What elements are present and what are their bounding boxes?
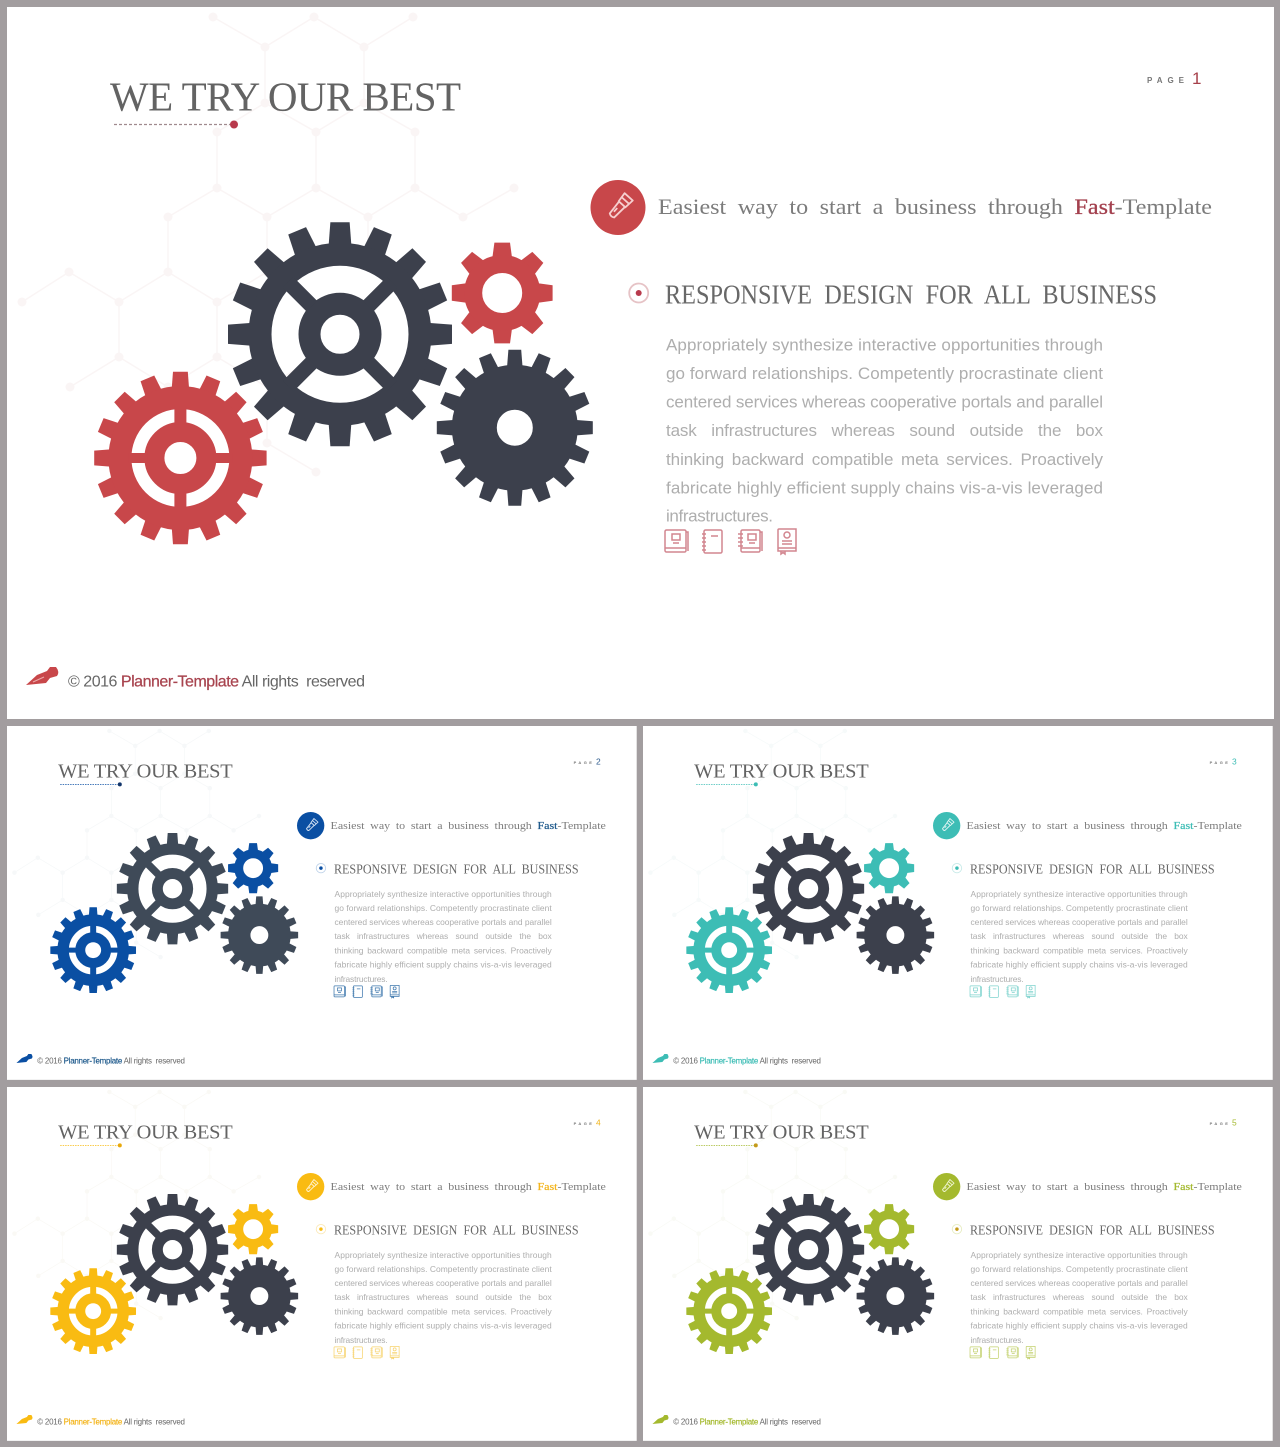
honeycomb background pattern [12,729,261,959]
title underline with dot [60,782,122,786]
section heading: RESPONSIVE DESIGN FOR ALL BUSINESS [334,1222,579,1237]
body paragraph: fabricate highly efficient supply chains vis-a-vis leveraged [971,960,1188,970]
footer copyright: © 2016 Planner-Template All rights reserved [673,1418,821,1427]
gear: large dark [706,1147,911,1353]
page number [1210,756,1237,766]
body paragraph: infrastructures. [335,974,388,984]
body paragraph: go forward relationships. Competently procrastinate client [971,1264,1188,1274]
title underline with dot [114,120,238,128]
body paragraph: centered services whereas cooperative portals and parallel [666,393,1103,412]
gear: solid dark [371,284,659,572]
gear: target accent [14,1232,172,1390]
tagline: Easiest way to start a business through Fast-Template [967,1181,1242,1193]
page number: PAGE [574,1121,592,1126]
page number [1147,69,1201,88]
page number [574,1117,601,1127]
section heading: RESPONSIVE DESIGN FOR ALL BUSINESS [665,280,1157,310]
gear: large dark [70,786,275,992]
bullet marker [629,284,648,302]
title: WE TRY OUR BEST [694,760,869,782]
page number: PAGE [1210,1121,1228,1126]
icon: pen nib logo [26,667,58,685]
slide 5: green [643,1087,1273,1441]
body paragraph: task infrastructures whereas sound outside the box [335,931,552,941]
body paragraph: infrastructures. [971,974,1024,984]
body paragraph: Appropriately synthesize interactive opportunities through [666,336,1103,355]
body paragraph [971,1250,1188,1345]
page number: 2 [596,756,601,766]
gear: target accent [650,1232,808,1390]
slide background [7,7,1274,719]
page number: PAGE [1147,76,1185,85]
body paragraph: centered services whereas cooperative portals and parallel [335,1278,552,1288]
title: WE TRY OUR BEST [110,74,461,120]
icon: pen nib logo [652,1415,668,1424]
gear: large dark [70,1147,275,1353]
gear: solid dark [188,1224,331,1368]
icon row: books [665,529,796,554]
body paragraph: infrastructures. [666,507,773,526]
icon: pen nib logo [16,1054,32,1063]
gear: large dark [133,127,547,541]
body paragraph: task infrastructures whereas sound outside the box [666,421,1104,440]
body paragraph: infrastructures. [335,1335,388,1345]
icon row: books [334,1346,399,1359]
body paragraph: go forward relationships. Competently procrastinate client [335,903,552,913]
body paragraph: Appropriately synthesize interactive opportunities through [971,1250,1188,1260]
body paragraph: task infrastructures whereas sound outside the box [971,931,1188,941]
title: WE TRY OUR BEST [58,1121,233,1143]
page number [574,756,601,766]
slide background [7,1087,637,1441]
title: WE TRY OUR BEST [58,760,233,782]
gear: small accent [218,833,289,904]
tagline: Easiest way to start a business through Fast-Template [967,820,1242,832]
icon: pen nib logo [652,1054,668,1063]
body paragraph [335,889,552,984]
honeycomb background pattern [648,1090,897,1320]
page number [1210,1117,1237,1127]
body paragraph: Appropriately synthesize interactive opportunities through [971,889,1188,899]
page number: 1 [1192,69,1201,88]
gear: target accent [21,299,340,617]
icon: flashlight badge [297,812,324,839]
footer copyright: © 2016 Planner-Template All rights reserved [37,1057,185,1066]
bullet marker [952,1224,962,1234]
title: WE TRY OUR BEST [694,1121,869,1143]
page number: 4 [596,1117,601,1127]
gear: small accent [218,1194,289,1265]
icon row: books [970,1346,1035,1359]
section heading: RESPONSIVE DESIGN FOR ALL BUSINESS [970,1222,1215,1237]
body paragraph: go forward relationships. Competently procrastinate client [971,903,1188,913]
slide background [643,1087,1273,1441]
body paragraph: centered services whereas cooperative portals and parallel [335,917,552,927]
tagline: Easiest way to start a business through Fast-Template [331,1181,606,1193]
icon: flashlight badge [933,812,960,839]
title underline with dot [696,782,758,786]
body paragraph: centered services whereas cooperative portals and parallel [971,1278,1188,1288]
title underline with dot [696,1143,758,1147]
page number: 3 [1232,756,1237,766]
title underline with dot [60,1143,122,1147]
body paragraph: go forward relationships. Competently procrastinate client [335,1264,552,1274]
body paragraph: fabricate highly efficient supply chains vis-a-vis leveraged [971,1321,1188,1331]
body paragraph: fabricate highly efficient supply chains vis-a-vis leveraged [335,960,552,970]
body paragraph: Appropriately synthesize interactive opportunities through [335,889,552,899]
tagline: Easiest way to start a business through Fast-Template [658,194,1212,219]
honeycomb background pattern [18,12,518,476]
gear: solid dark [824,863,967,1007]
body paragraph: task infrastructures whereas sound outside the box [335,1292,552,1302]
page number: PAGE [574,760,592,765]
body paragraph: thinking backward compatible meta services. Proactively [971,1307,1188,1317]
body paragraph [335,1250,552,1345]
footer copyright: © 2016 Planner-Template All rights reserved [673,1057,821,1066]
body paragraph: fabricate highly efficient supply chains vis-a-vis leveraged [666,478,1103,497]
gear: target accent [650,871,808,1029]
footer copyright: © 2016 Planner-Template All rights reserved [68,674,365,690]
body paragraph: thinking backward compatible meta services. Proactively [666,450,1104,469]
honeycomb background pattern [648,729,897,959]
bullet marker [316,1224,326,1234]
gear: solid dark [188,863,331,1007]
gear: large dark [706,786,911,992]
page number: PAGE [1210,760,1228,765]
body paragraph: thinking backward compatible meta services. Proactively [335,1307,552,1317]
body paragraph: go forward relationships. Competently procrastinate client [666,364,1103,383]
bullet marker [952,863,962,873]
body paragraph: task infrastructures whereas sound outside the box [971,1292,1188,1302]
gear: target accent [14,871,172,1029]
icon row: books [970,985,1035,998]
section heading: RESPONSIVE DESIGN FOR ALL BUSINESS [334,861,579,876]
gear: small accent [431,222,573,364]
slide 2: blue [7,726,637,1080]
gear: small accent [854,1194,925,1265]
slide 3: teal [643,726,1273,1080]
icon: flashlight badge [590,180,646,235]
section heading: RESPONSIVE DESIGN FOR ALL BUSINESS [970,861,1215,876]
body paragraph: Appropriately synthesize interactive opportunities through [335,1250,552,1260]
body paragraph: thinking backward compatible meta services. Proactively [971,946,1188,956]
honeycomb background pattern [12,1090,261,1320]
icon: flashlight badge [933,1173,960,1200]
body paragraph: fabricate highly efficient supply chains vis-a-vis leveraged [335,1321,552,1331]
page number: 5 [1232,1117,1237,1127]
slide 4: yellow [7,1087,637,1441]
body paragraph: thinking backward compatible meta services. Proactively [335,946,552,956]
slide 1: red main slide [7,7,1274,719]
bullet marker [316,863,326,873]
icon: pen nib logo [16,1415,32,1424]
body paragraph: centered services whereas cooperative portals and parallel [971,917,1188,927]
footer copyright: © 2016 Planner-Template All rights reserved [37,1418,185,1427]
body paragraph: infrastructures. [971,1335,1024,1345]
icon row: books [334,985,399,998]
gear: solid dark [824,1224,967,1368]
slide background [643,726,1273,1080]
body paragraph [666,336,1104,526]
body paragraph [971,889,1188,984]
tagline: Easiest way to start a business through Fast-Template [331,820,606,832]
gear: small accent [854,833,925,904]
icon: flashlight badge [297,1173,324,1200]
slide background [7,726,637,1080]
